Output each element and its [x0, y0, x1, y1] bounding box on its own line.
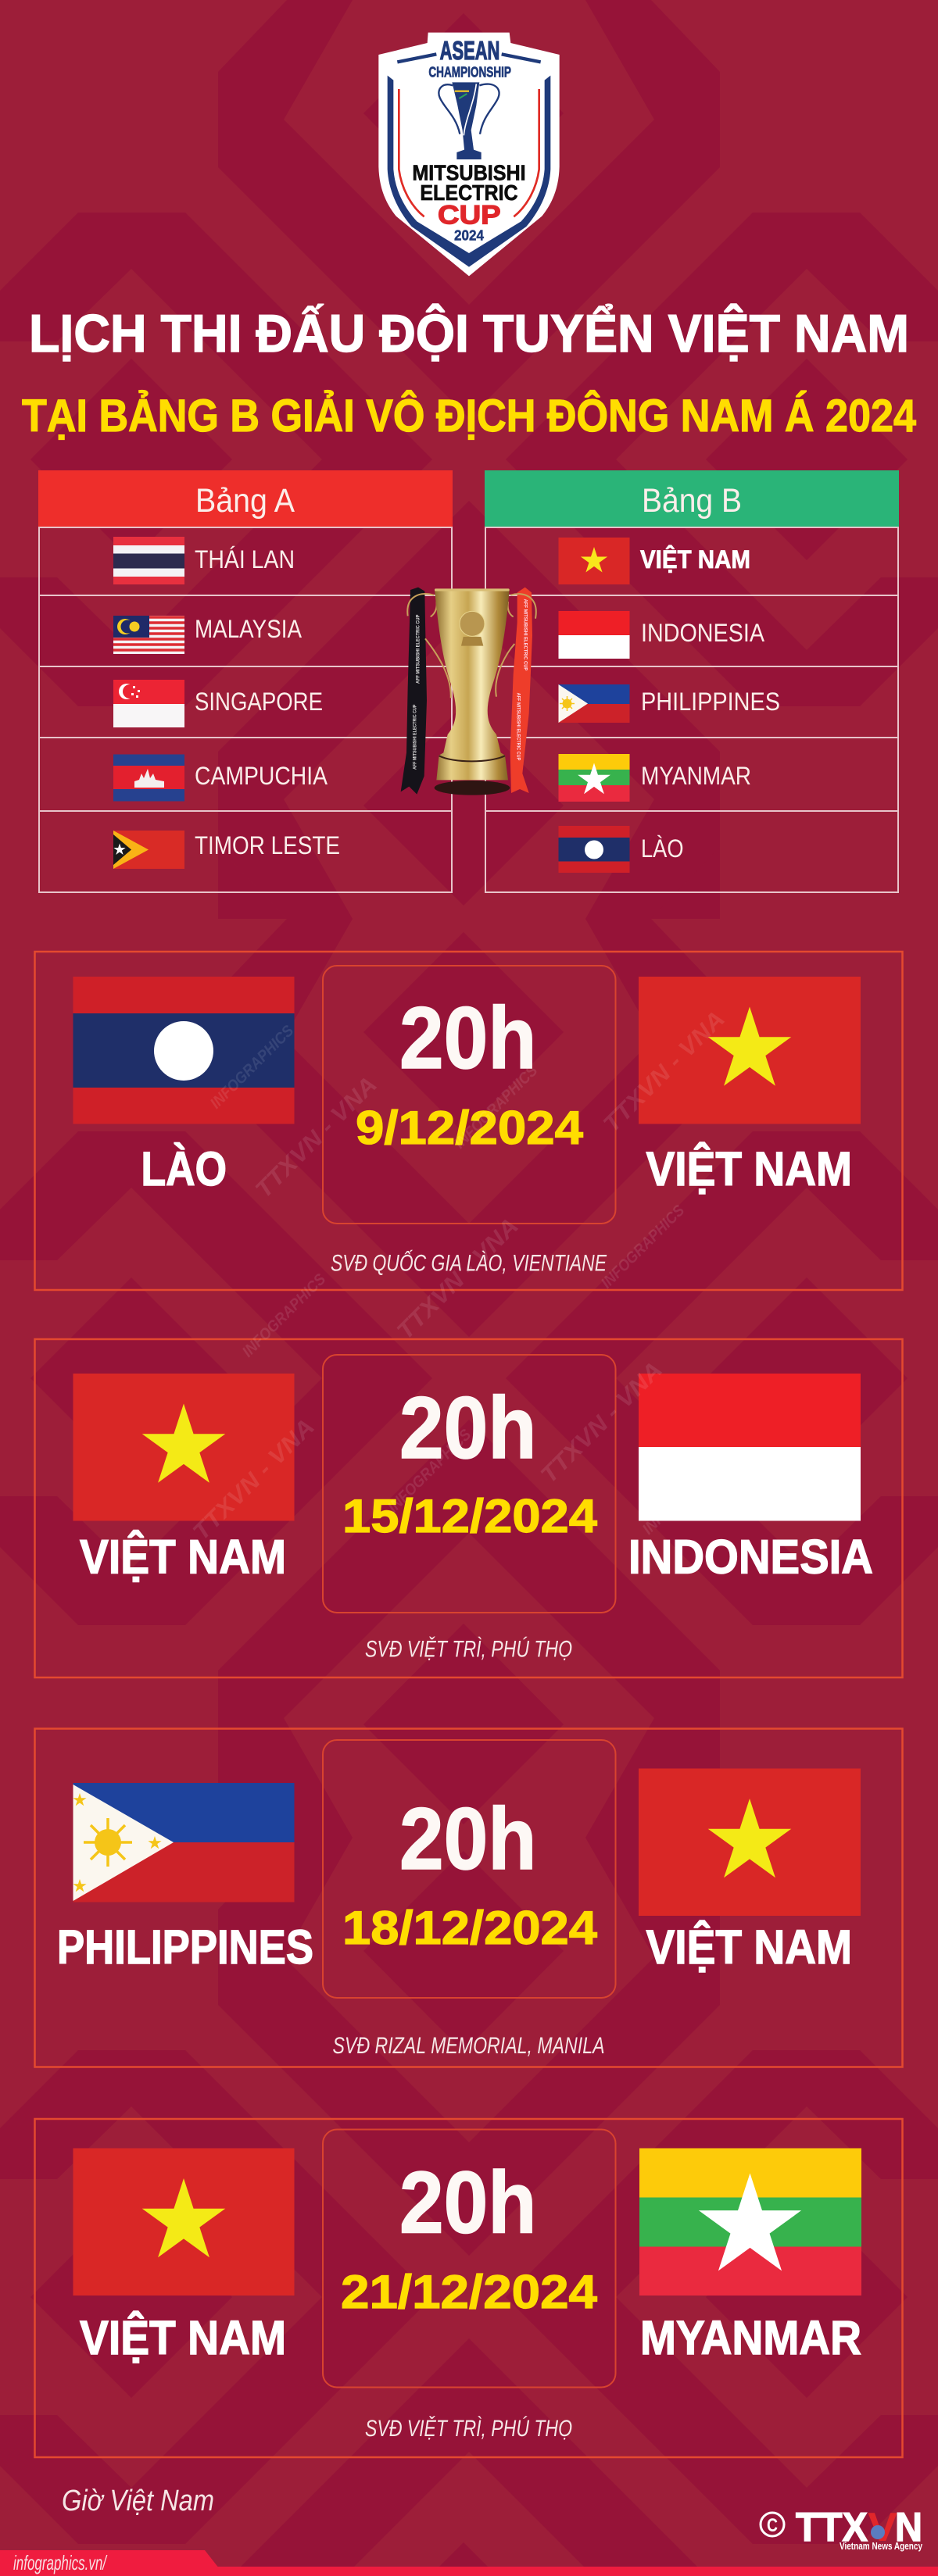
row: Philippines [558, 684, 780, 723]
watermarks: TTXVN - VNA [188, 1414, 320, 1545]
flag: Việt Nam [639, 1769, 861, 1916]
flag: Việt Nam [73, 2149, 294, 2296]
row: Việt Nam: VIỆT NAM [640, 545, 750, 573]
row: Philippines: PHILIPPINES [641, 688, 780, 716]
logo: ASEAN Championship Mitsubishi Electric Cup 2024: ASEAN [440, 37, 499, 66]
date: 9/12/2024 [356, 1102, 584, 1154]
watermarks: INFOGRAPHICS [451, 1062, 542, 1152]
time: 20h [399, 1790, 536, 1888]
date: 21/12/2024 [341, 2266, 598, 2318]
black ribbon: AFF MITSUBISHI ELECTRIC CUP [416, 614, 421, 684]
row: Singapore: SINGAPORE [195, 688, 323, 716]
row: Campuchia [113, 755, 328, 802]
title: LỊCH THI ĐẤU ĐỘI TUYỂN VIỆT NAM [29, 303, 909, 363]
trophy with ribbons [401, 588, 536, 795]
watermarks: INFOGRAPHICS [385, 1426, 475, 1517]
row: Lào: LÀO [641, 834, 683, 863]
venue: SVĐ RIZAL MEMORIAL, MANILA [333, 2033, 605, 2059]
row: Timor Leste: TIMOR LESTE [195, 831, 340, 859]
black ribbon: AFF MITSUBISHI ELECTRIC CUP [413, 704, 418, 770]
row: Myanmar: MYANMAR [641, 762, 751, 790]
heading: Bảng A [38, 470, 453, 527]
heading: Bảng B: Bảng B [642, 482, 742, 520]
row: Việt Nam [558, 538, 750, 584]
match 4: Việt Nam vs Myanmar [34, 2119, 902, 2457]
watermarks [188, 1006, 730, 1545]
match 1: Lào vs Việt Nam [34, 952, 902, 1290]
logo: ASEAN Championship Mitsubishi Electric Cup 2024: CUP [438, 201, 501, 230]
row: Myanmar [558, 754, 751, 802]
red ribbon: AFF MITSUBISHI ELECTRIC CUP [523, 599, 528, 671]
footer band [0, 2550, 938, 2576]
flag: Indonesia [639, 1374, 861, 1520]
row: Indonesia [558, 611, 765, 659]
row: Malaysia [113, 615, 303, 654]
flag: Việt Nam [639, 977, 861, 1124]
team: Indonesia: INDONESIA [628, 1530, 873, 1583]
venue: SVĐ VIỆT TRÌ, PHÚ THỌ [365, 2416, 572, 2442]
time: 20h [399, 2153, 536, 2252]
watermarks: TTXVN - VNA [599, 1006, 730, 1138]
watermarks: INFOGRAPHICS [598, 1202, 689, 1292]
date: 15/12/2024 [342, 1490, 598, 1542]
heading: Bảng A: Bảng A [195, 482, 295, 520]
row: Campuchia: CAMPUCHIA [195, 762, 328, 790]
row: Malaysia: MALAYSIA [195, 615, 303, 643]
watermarks: TTXVN - VNA [392, 1213, 524, 1345]
venue: SVĐ VIỆT TRÌ, PHÚ THỌ [365, 1636, 572, 1663]
logo: ASEAN Championship Mitsubishi Electric Cup 2024: MITSUBISHI [412, 161, 526, 185]
logo: TTXVN Vietnam News Agency: N [895, 2505, 922, 2550]
time: 20h [399, 989, 536, 1087]
row: Thái Lan [113, 537, 295, 584]
note: Giờ Việt Nam: Giờ Việt Nam [62, 2485, 214, 2517]
row: Singapore [113, 680, 323, 727]
team: Việt Nam: VIỆT NAM [646, 1142, 852, 1195]
time: 20h [399, 1379, 536, 1477]
watermarks: TTXVN - VNA [536, 1357, 668, 1488]
flag: Lào [73, 977, 294, 1124]
flag: Myanmar [639, 2149, 861, 2296]
watermarks: INFOGRAPHICS [207, 1022, 298, 1113]
date: 18/12/2024 [342, 1902, 598, 1954]
team: Việt Nam: VIỆT NAM [80, 2311, 286, 2364]
team: Việt Nam: VIỆT NAM [80, 1530, 286, 1583]
row: Thái Lan: THÁI LAN [195, 545, 295, 573]
watermarks: INFOGRAPHICS [639, 1448, 730, 1538]
team: Lào: LÀO [141, 1142, 227, 1195]
red ribbon [510, 588, 532, 793]
match 2: Việt Nam vs Indonesia [34, 1339, 902, 1677]
flag: Philippines [73, 1783, 294, 1902]
heading: Bảng B [485, 470, 899, 527]
logo: ASEAN Championship Mitsubishi Electric Cup 2024: 2024 [454, 227, 485, 243]
logo: TTXVN Vietnam News Agency: C [767, 2515, 778, 2536]
team: Việt Nam: VIỆT NAM [646, 1920, 852, 1974]
row: Indonesia: INDONESIA [641, 619, 765, 647]
logo: ASEAN Championship Mitsubishi Electric Cup 2024 [378, 33, 560, 276]
footer band: infographics.vn/ [13, 2551, 108, 2574]
watermarks: INFOGRAPHICS [239, 1270, 330, 1361]
row: Lào [558, 826, 683, 873]
red ribbon: AFF MITSUBISHI ELECTRIC CUP [516, 693, 521, 761]
panel: group A table [38, 470, 453, 892]
logo: ASEAN Championship Mitsubishi Electric Cup 2024: CHAMPIONSHIP [428, 63, 511, 80]
team: Myanmar: MYANMAR [640, 2311, 861, 2364]
watermarks: TTXVN - VNA [251, 1072, 382, 1203]
row: Timor Leste [113, 831, 340, 869]
logo: TTXVN Vietnam News Agency: TTX [796, 2505, 868, 2550]
logo: TTXVN Vietnam News Agency: V [868, 2505, 897, 2550]
black ribbon [401, 588, 427, 795]
flag: Việt Nam [73, 1374, 294, 1520]
logo: TTXVN Vietnam News Agency [761, 2505, 923, 2552]
panel: group B table [485, 470, 899, 892]
team: Philippines: PHILIPPINES [57, 1920, 313, 1974]
logo: ASEAN Championship Mitsubishi Electric Cup 2024: ELECTRIC [420, 180, 518, 205]
match 3: Philippines vs Việt Nam [34, 1728, 902, 2067]
venue: SVĐ QUỐC GIA LÀO, VIENTIANE [331, 1250, 607, 1277]
